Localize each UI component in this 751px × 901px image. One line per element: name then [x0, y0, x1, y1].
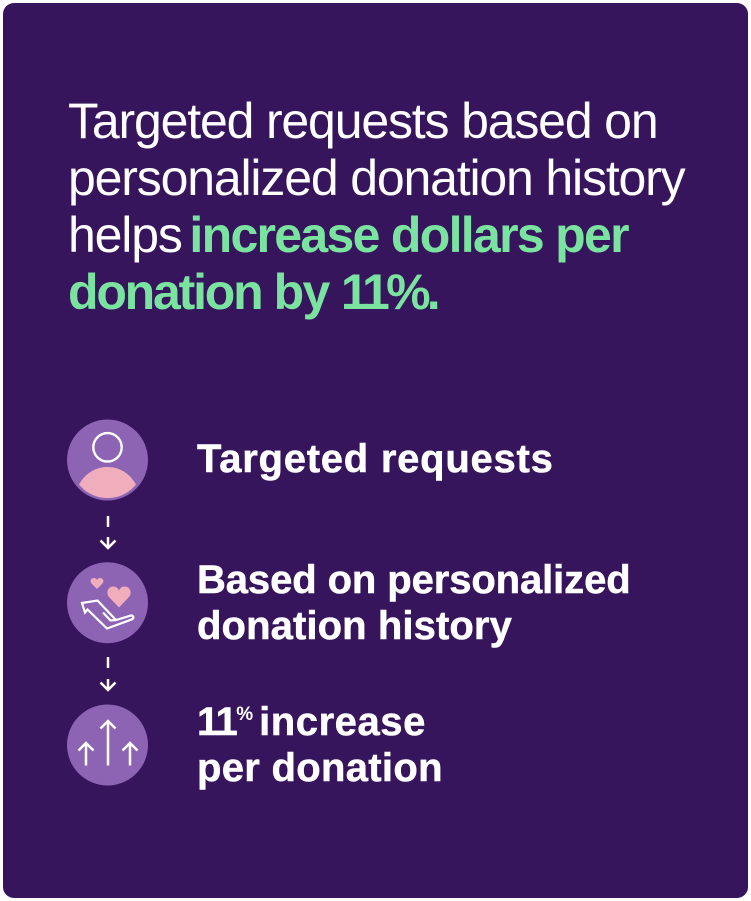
step label: 11% increase: 11% increase — [197, 700, 426, 744]
title: Targeted requests based on — [68, 93, 657, 149]
step label: 11% increase: per donation — [197, 746, 443, 790]
step label: personalized history — [197, 558, 631, 648]
title: helps increase dollars per — [68, 207, 628, 263]
title: personalized donation history — [68, 150, 684, 206]
icon: person — [67, 420, 148, 500]
step label: personalized history: Based on personalized — [197, 558, 631, 602]
step label: 11% increase — [197, 700, 443, 790]
step label: personalized history: donation history — [197, 604, 512, 648]
icon: hand with hearts — [67, 562, 148, 643]
title: donation by 11%. — [68, 264, 437, 320]
arrow: step two to step three — [100, 657, 116, 690]
title — [68, 93, 686, 320]
step label: targeted requests: Targeted requests — [197, 437, 554, 481]
icon: rising arrows — [67, 704, 148, 786]
arrow: step one to step two — [100, 516, 116, 548]
